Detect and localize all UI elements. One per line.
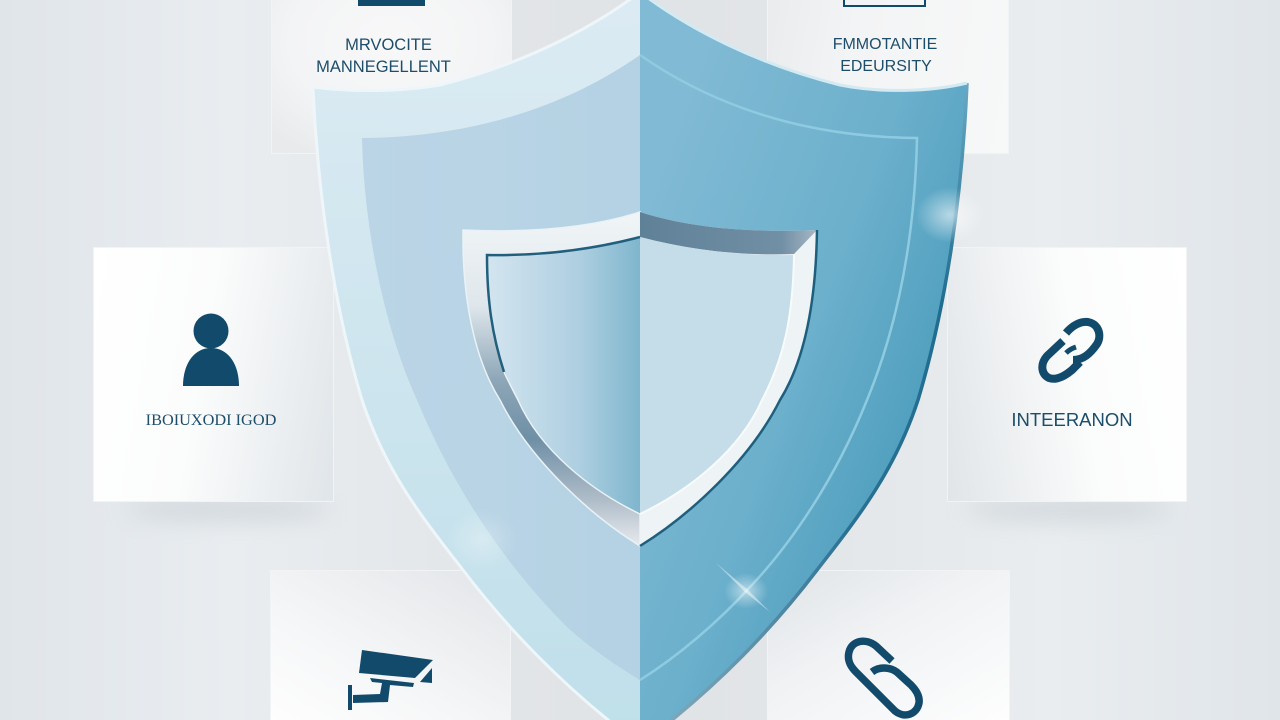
emblem inner right [640, 237, 794, 514]
text: top left label: MRVOCITE [345, 36, 432, 54]
shield left edge highlight [313, 0, 640, 720]
emblem shield [463, 212, 817, 546]
panel: bottom left card [270, 570, 511, 720]
card shadow: left [125, 498, 330, 520]
icon: security camera [348, 650, 433, 710]
outer shield [313, 0, 967, 720]
shield left half [313, 0, 640, 720]
panel: top right card [767, 0, 1009, 154]
icon: top left partial [358, 0, 425, 6]
icon: paper clip link [844, 638, 923, 719]
shield right half [640, 0, 967, 720]
glint: lower right star [716, 563, 770, 612]
text: top right label: EDEURSITY [840, 58, 932, 75]
text: top right label [833, 36, 937, 75]
glint: right shoulder [916, 187, 984, 243]
glint: lower left [446, 508, 518, 572]
emblem top band right [640, 212, 817, 254]
icon: chain link [1038, 318, 1104, 383]
text: top right label: FMMOTANTIE [833, 36, 937, 53]
panel: left card [93, 247, 334, 502]
text: top left label [316, 36, 451, 76]
emblem frame dark edge [640, 230, 817, 546]
icon: top right partial [843, 0, 926, 7]
emblem inner left light edge [504, 372, 640, 514]
emblem frame left [463, 212, 640, 546]
text: top left label: MANNEGELLENT [316, 58, 451, 76]
inner panel left [362, 55, 640, 680]
panel: top left card [271, 0, 512, 154]
text: right label: INTEERANON [1011, 409, 1133, 430]
inner panel right outline [640, 55, 917, 680]
card shadow: right [965, 498, 1170, 520]
emblem frame right [640, 212, 817, 546]
shield top highlight [640, 0, 967, 90]
emblem inner right light edge [640, 255, 794, 514]
emblem inner left [487, 237, 640, 514]
text: left label: IBOIUXODI IGOD [146, 410, 276, 429]
shield right edge [640, 83, 967, 720]
panel: right card [947, 247, 1187, 502]
emblem inner left dark edge [487, 237, 640, 372]
panel: bottom right card [767, 570, 1010, 720]
icon: person [183, 314, 239, 386]
